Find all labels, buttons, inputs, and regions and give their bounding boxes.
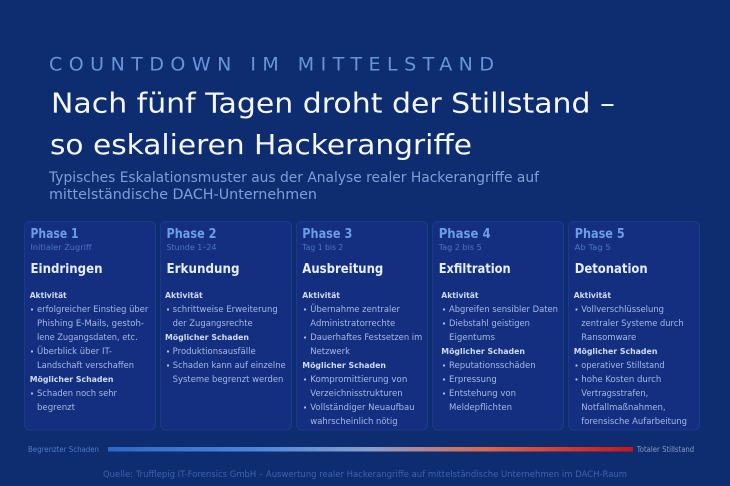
activity list bbox=[574, 291, 684, 342]
activity list bbox=[165, 291, 278, 328]
phase label: Phase 2 bbox=[166, 227, 216, 242]
damage list: Reputationsschäden bbox=[449, 360, 536, 370]
gradient bar bbox=[108, 447, 633, 452]
phase label: Phase 5 bbox=[575, 227, 625, 242]
damage list: hohe Kosten durch bbox=[581, 374, 661, 384]
panel: phase 5 bbox=[568, 222, 700, 430]
damage list: Produktionsausfälle bbox=[173, 346, 256, 356]
damage list bbox=[574, 347, 687, 426]
phase name: Eindringen bbox=[30, 262, 102, 277]
severity scale bbox=[28, 445, 694, 454]
activity list: Überblick über IT- bbox=[37, 346, 112, 356]
activity list: Vollverschlüsselung bbox=[581, 304, 664, 314]
activity list: Phishing E-Mails, gestoh- bbox=[37, 318, 144, 328]
subtitle bbox=[48, 170, 540, 203]
phase label: Phase 3 bbox=[302, 227, 352, 242]
damage list: Möglicher Schaden bbox=[30, 375, 114, 384]
activity list: Aktivität bbox=[302, 291, 340, 300]
damage list: Möglicher Schaden bbox=[574, 347, 658, 356]
timing: Stunde 1–24 bbox=[166, 242, 216, 252]
kicker: COUNTDOWN IM MITTELSTAND bbox=[49, 54, 494, 76]
timing: Tag 2 bis 5 bbox=[438, 242, 482, 252]
activity list bbox=[441, 291, 558, 342]
scale label: high: Totaler Stillstand bbox=[636, 445, 694, 454]
activity list: Aktivität bbox=[574, 291, 611, 300]
phase label: Phase 4 bbox=[439, 227, 491, 242]
damage list: forensische Aufarbeitung bbox=[581, 416, 687, 426]
damage list: Kompromittierung von bbox=[310, 374, 407, 384]
activity list: Aktivität bbox=[441, 291, 479, 300]
phase name: Erkundung bbox=[166, 262, 240, 277]
activity list: Diebstahl geistigen bbox=[449, 318, 530, 328]
activity list: Ransomware bbox=[581, 332, 636, 342]
damage list: Möglicher Schaden bbox=[165, 333, 249, 342]
damage list: Notfallmaßnahmen, bbox=[581, 402, 666, 412]
title bbox=[50, 86, 615, 161]
timing: Tag 1 bis 2 bbox=[301, 242, 343, 252]
damage list: Systeme begrenzt werden bbox=[173, 374, 283, 384]
activity list: Abgreifen sensibler Daten bbox=[449, 304, 558, 314]
title: Nach fünf Tagen droht der Stillstand – bbox=[51, 86, 615, 120]
damage list: Vollständiger Neuaufbau bbox=[310, 402, 415, 412]
activity list: Administratorrechte bbox=[310, 318, 395, 328]
activity list: lene Zugangsdaten, etc. bbox=[37, 332, 138, 342]
panel: phase 2 bbox=[160, 222, 292, 430]
activity list: schrittweise Erweiterung bbox=[173, 304, 278, 314]
activity list: Dauerhaftes Festsetzen im bbox=[310, 332, 422, 342]
panel: phase 3 bbox=[296, 222, 428, 430]
damage list: Meldepflichten bbox=[449, 402, 512, 412]
damage list bbox=[165, 333, 286, 384]
damage list: Verzeichnisstrukturen bbox=[310, 388, 403, 398]
activity list: Netzwerk bbox=[310, 346, 350, 356]
activity list: erfolgreicher Einstieg über bbox=[37, 304, 149, 314]
damage list bbox=[30, 375, 118, 412]
damage list: Schaden noch sehr bbox=[37, 388, 118, 398]
title: so eskalieren Hackerangriffe bbox=[50, 128, 472, 161]
damage list: Entstehung von bbox=[449, 388, 516, 398]
damage list: operativer Stillstand bbox=[581, 360, 665, 370]
panel: phase 1 bbox=[24, 222, 156, 430]
timing: Ab Tag 5 bbox=[575, 242, 611, 252]
phase label: Phase 1 bbox=[30, 227, 78, 242]
activity list: Landschaft verschaffen bbox=[37, 360, 134, 370]
activity list: Übernahme zentraler bbox=[310, 304, 401, 314]
activity list: Aktivität bbox=[30, 291, 67, 300]
phase name: Detonation bbox=[575, 262, 648, 277]
damage list: Möglicher Schaden bbox=[441, 347, 525, 356]
damage list: Vertragsstrafen, bbox=[581, 388, 648, 398]
damage list: Schaden kann auf einzelne bbox=[173, 360, 286, 370]
phase name: Exfiltration bbox=[439, 262, 511, 277]
damage list: begrenzt bbox=[37, 402, 76, 412]
damage list: Möglicher Schaden bbox=[302, 361, 386, 370]
scale label: low: Begrenzter Schaden bbox=[28, 445, 99, 454]
damage list: wahrscheinlich nötig bbox=[310, 416, 398, 426]
phase name: Ausbreitung bbox=[302, 262, 383, 277]
activity list: Aktivität bbox=[165, 291, 203, 300]
damage list bbox=[441, 347, 536, 412]
activity list: zentraler Systeme durch bbox=[581, 318, 684, 328]
damage list bbox=[302, 361, 415, 426]
activity list bbox=[302, 291, 422, 356]
source note: Quelle: Trufflepig IT-Forensics GmbH – Auswertung realer Hackerangriffe auf mittelständische Unternehmen im DACH-Raum bbox=[103, 469, 627, 479]
subtitle: mittelständische DACH-Unternehmen bbox=[49, 187, 317, 203]
activity list: der Zugangsrechte bbox=[173, 318, 253, 328]
subtitle: Typisches Eskalationsmuster aus der Analyse realer Hackerangriffe auf bbox=[48, 170, 540, 186]
damage list: Erpressung bbox=[449, 374, 497, 384]
panel: phase 4 bbox=[432, 222, 564, 430]
timing: Initialer Zugriff bbox=[30, 242, 92, 252]
activity list bbox=[30, 291, 149, 370]
activity list: Eigentums bbox=[449, 332, 495, 342]
